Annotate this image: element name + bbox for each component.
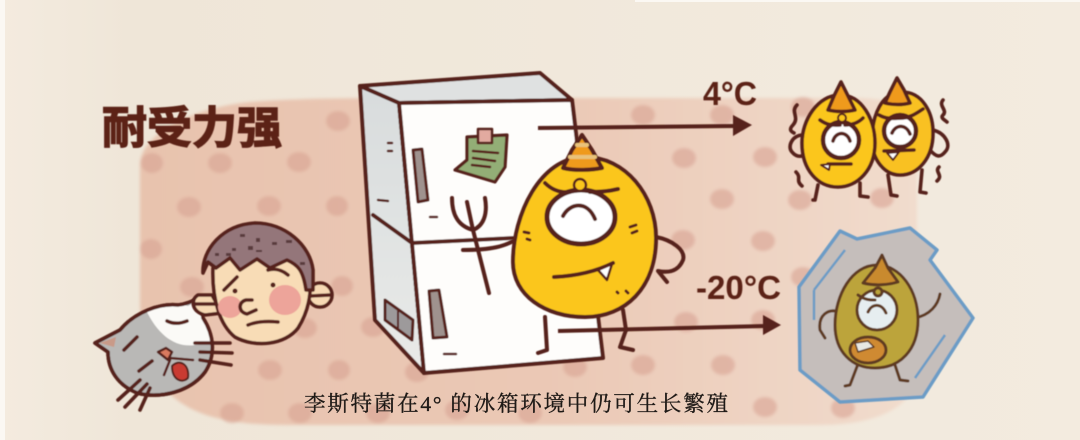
side vent [385, 300, 413, 340]
arrow: to -20°C [558, 315, 781, 335]
icon: refrigerator [360, 73, 603, 373]
label: 4°C: 4°C [703, 75, 757, 112]
right bacterium [872, 78, 948, 196]
icon: two shivering bacteria at 4°C [790, 78, 948, 200]
panel: pink spotted backdrop [140, 97, 917, 425]
title: 耐受力强 [102, 104, 282, 153]
door handles [413, 149, 447, 338]
icon: memo note on fridge [455, 129, 507, 182]
arrow: to 4°C [538, 115, 752, 136]
caption: 李斯特菌在4° 的冰箱环境中仍可生长繁殖 [304, 392, 728, 416]
icon: large yellow bacterium with pitchfork [452, 135, 683, 353]
icon: frozen bacterium in ice at -20°C [799, 228, 973, 402]
shiver lines [791, 100, 947, 186]
icon: sneezing boy head [193, 223, 332, 343]
icon: cat [95, 297, 232, 410]
left bacterium [790, 82, 875, 200]
label: -20°C: -20°C [696, 269, 781, 306]
